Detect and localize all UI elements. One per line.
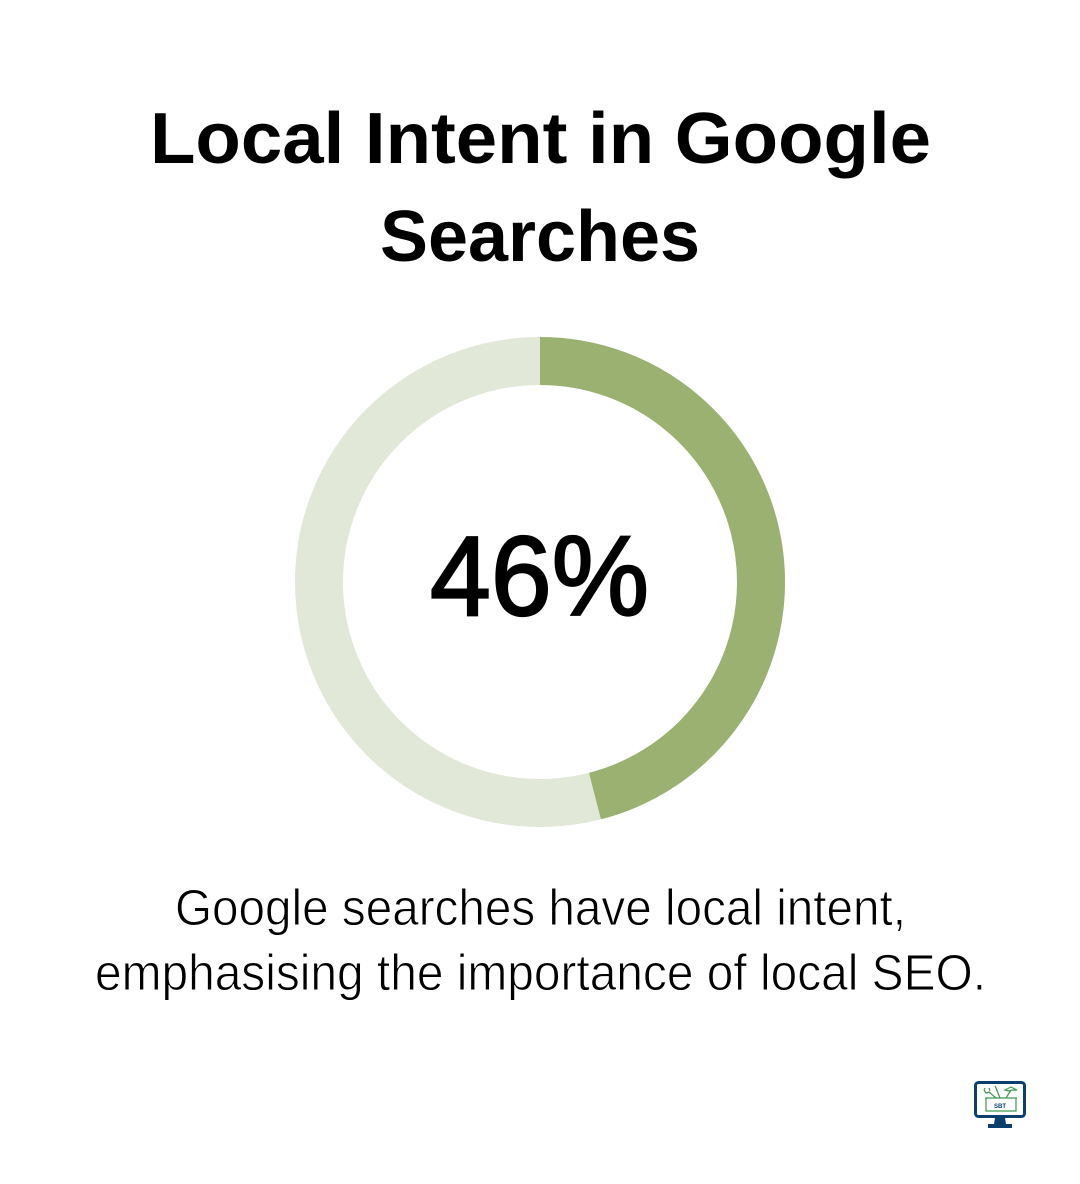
description text xyxy=(95,879,986,1001)
title: Searches xyxy=(380,197,700,277)
toolbox and tools xyxy=(984,1086,1017,1111)
donut chart: 46% xyxy=(319,361,761,803)
monitor stand xyxy=(988,1118,1012,1128)
title: Local Intent in Google xyxy=(150,99,931,179)
description text: Google searches have local intent, xyxy=(175,879,906,936)
icon: monitor logo with toolbox xyxy=(976,1082,1024,1128)
monitor frame xyxy=(976,1082,1024,1116)
description text: emphasising the importance of local SEO. xyxy=(95,944,986,1001)
title xyxy=(150,99,931,277)
center value: 46% xyxy=(430,513,649,639)
donut value arc xyxy=(540,361,761,796)
toolbox label: SBT xyxy=(994,1104,1006,1110)
donut track xyxy=(319,361,761,803)
